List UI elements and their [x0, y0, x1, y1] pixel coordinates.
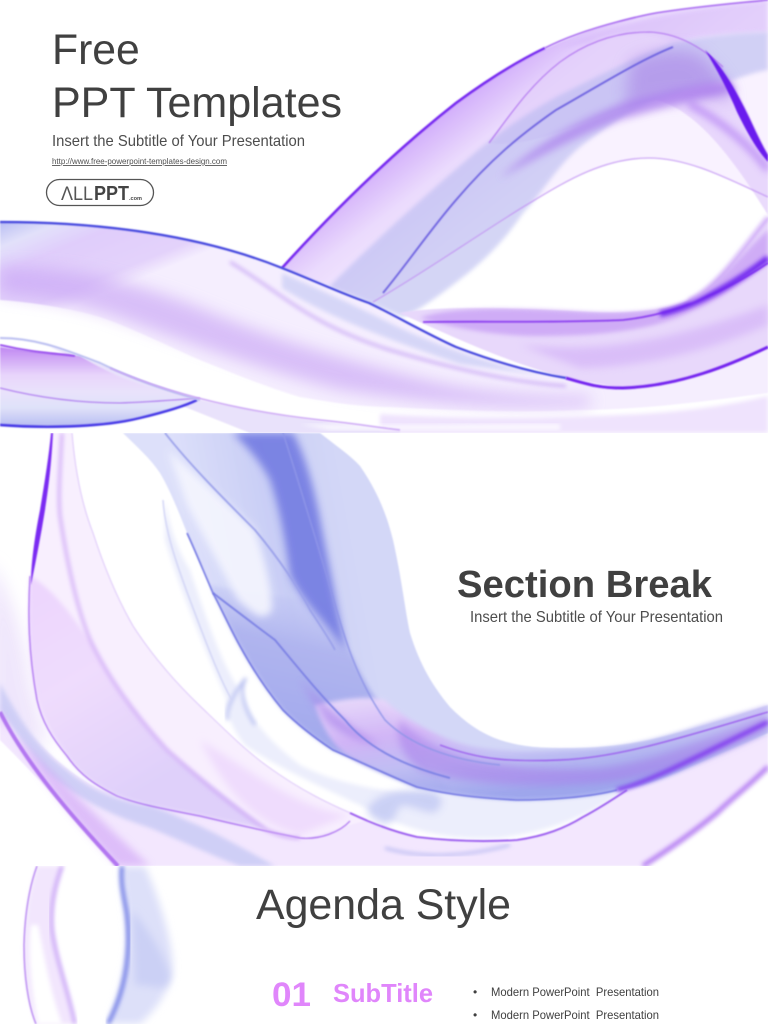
- agenda item 01: [272, 976, 659, 1022]
- subtitle label: SubTitle: [333, 978, 433, 1008]
- ribbon artwork: blue loop: [108, 866, 173, 1024]
- agenda heading: Agenda Style: [256, 881, 511, 929]
- logo: ALLPPT: .com: [129, 196, 143, 202]
- bullet list: Modern PowerPoint Presentation: [491, 985, 659, 999]
- bullet list: Modern PowerPoint Presentation: [491, 1008, 659, 1022]
- ribbon artwork: bottom strands: [0, 338, 768, 433]
- ribbon artwork: upper purple arch: [282, 0, 768, 317]
- section heading: Section Break: [457, 564, 713, 606]
- section subtitle: Insert the Subtitle of Your Presentation: [470, 609, 723, 626]
- logo: ALLPPT: ΛLL: [61, 184, 93, 205]
- title: Free PPT Templates: Free: [52, 26, 140, 74]
- bullet list: •: [473, 1008, 477, 1022]
- logo: ALLPPT: PPT: [94, 183, 129, 205]
- bullet list: •: [473, 985, 477, 999]
- subtitle: Insert the Subtitle of Your Presentation: [52, 133, 305, 150]
- ribbon artwork: purple veil: [0, 433, 768, 866]
- slide 2: section break: [0, 433, 768, 866]
- logo: ALLPPT: [46, 180, 154, 206]
- ribbon artwork: main wave band: [0, 222, 768, 411]
- slide 1: title slide: [0, 0, 768, 433]
- title: Free PPT Templates: [52, 26, 342, 127]
- slide 3: agenda: [22, 866, 658, 1024]
- title: Free PPT Templates: PPT Templates: [52, 79, 342, 127]
- ribbon artwork: lower purple band: [399, 217, 768, 388]
- ribbon artwork: main blue wave: [123, 433, 768, 800]
- number 01: 01: [272, 976, 311, 1014]
- bullet list: [473, 985, 659, 1022]
- ribbon artwork: pale blue strand and curl: [163, 500, 640, 855]
- ribbon artwork: purple loop: [24, 866, 75, 1024]
- website link: http://www.free-powerpoint-templates-design.com: [52, 156, 227, 166]
